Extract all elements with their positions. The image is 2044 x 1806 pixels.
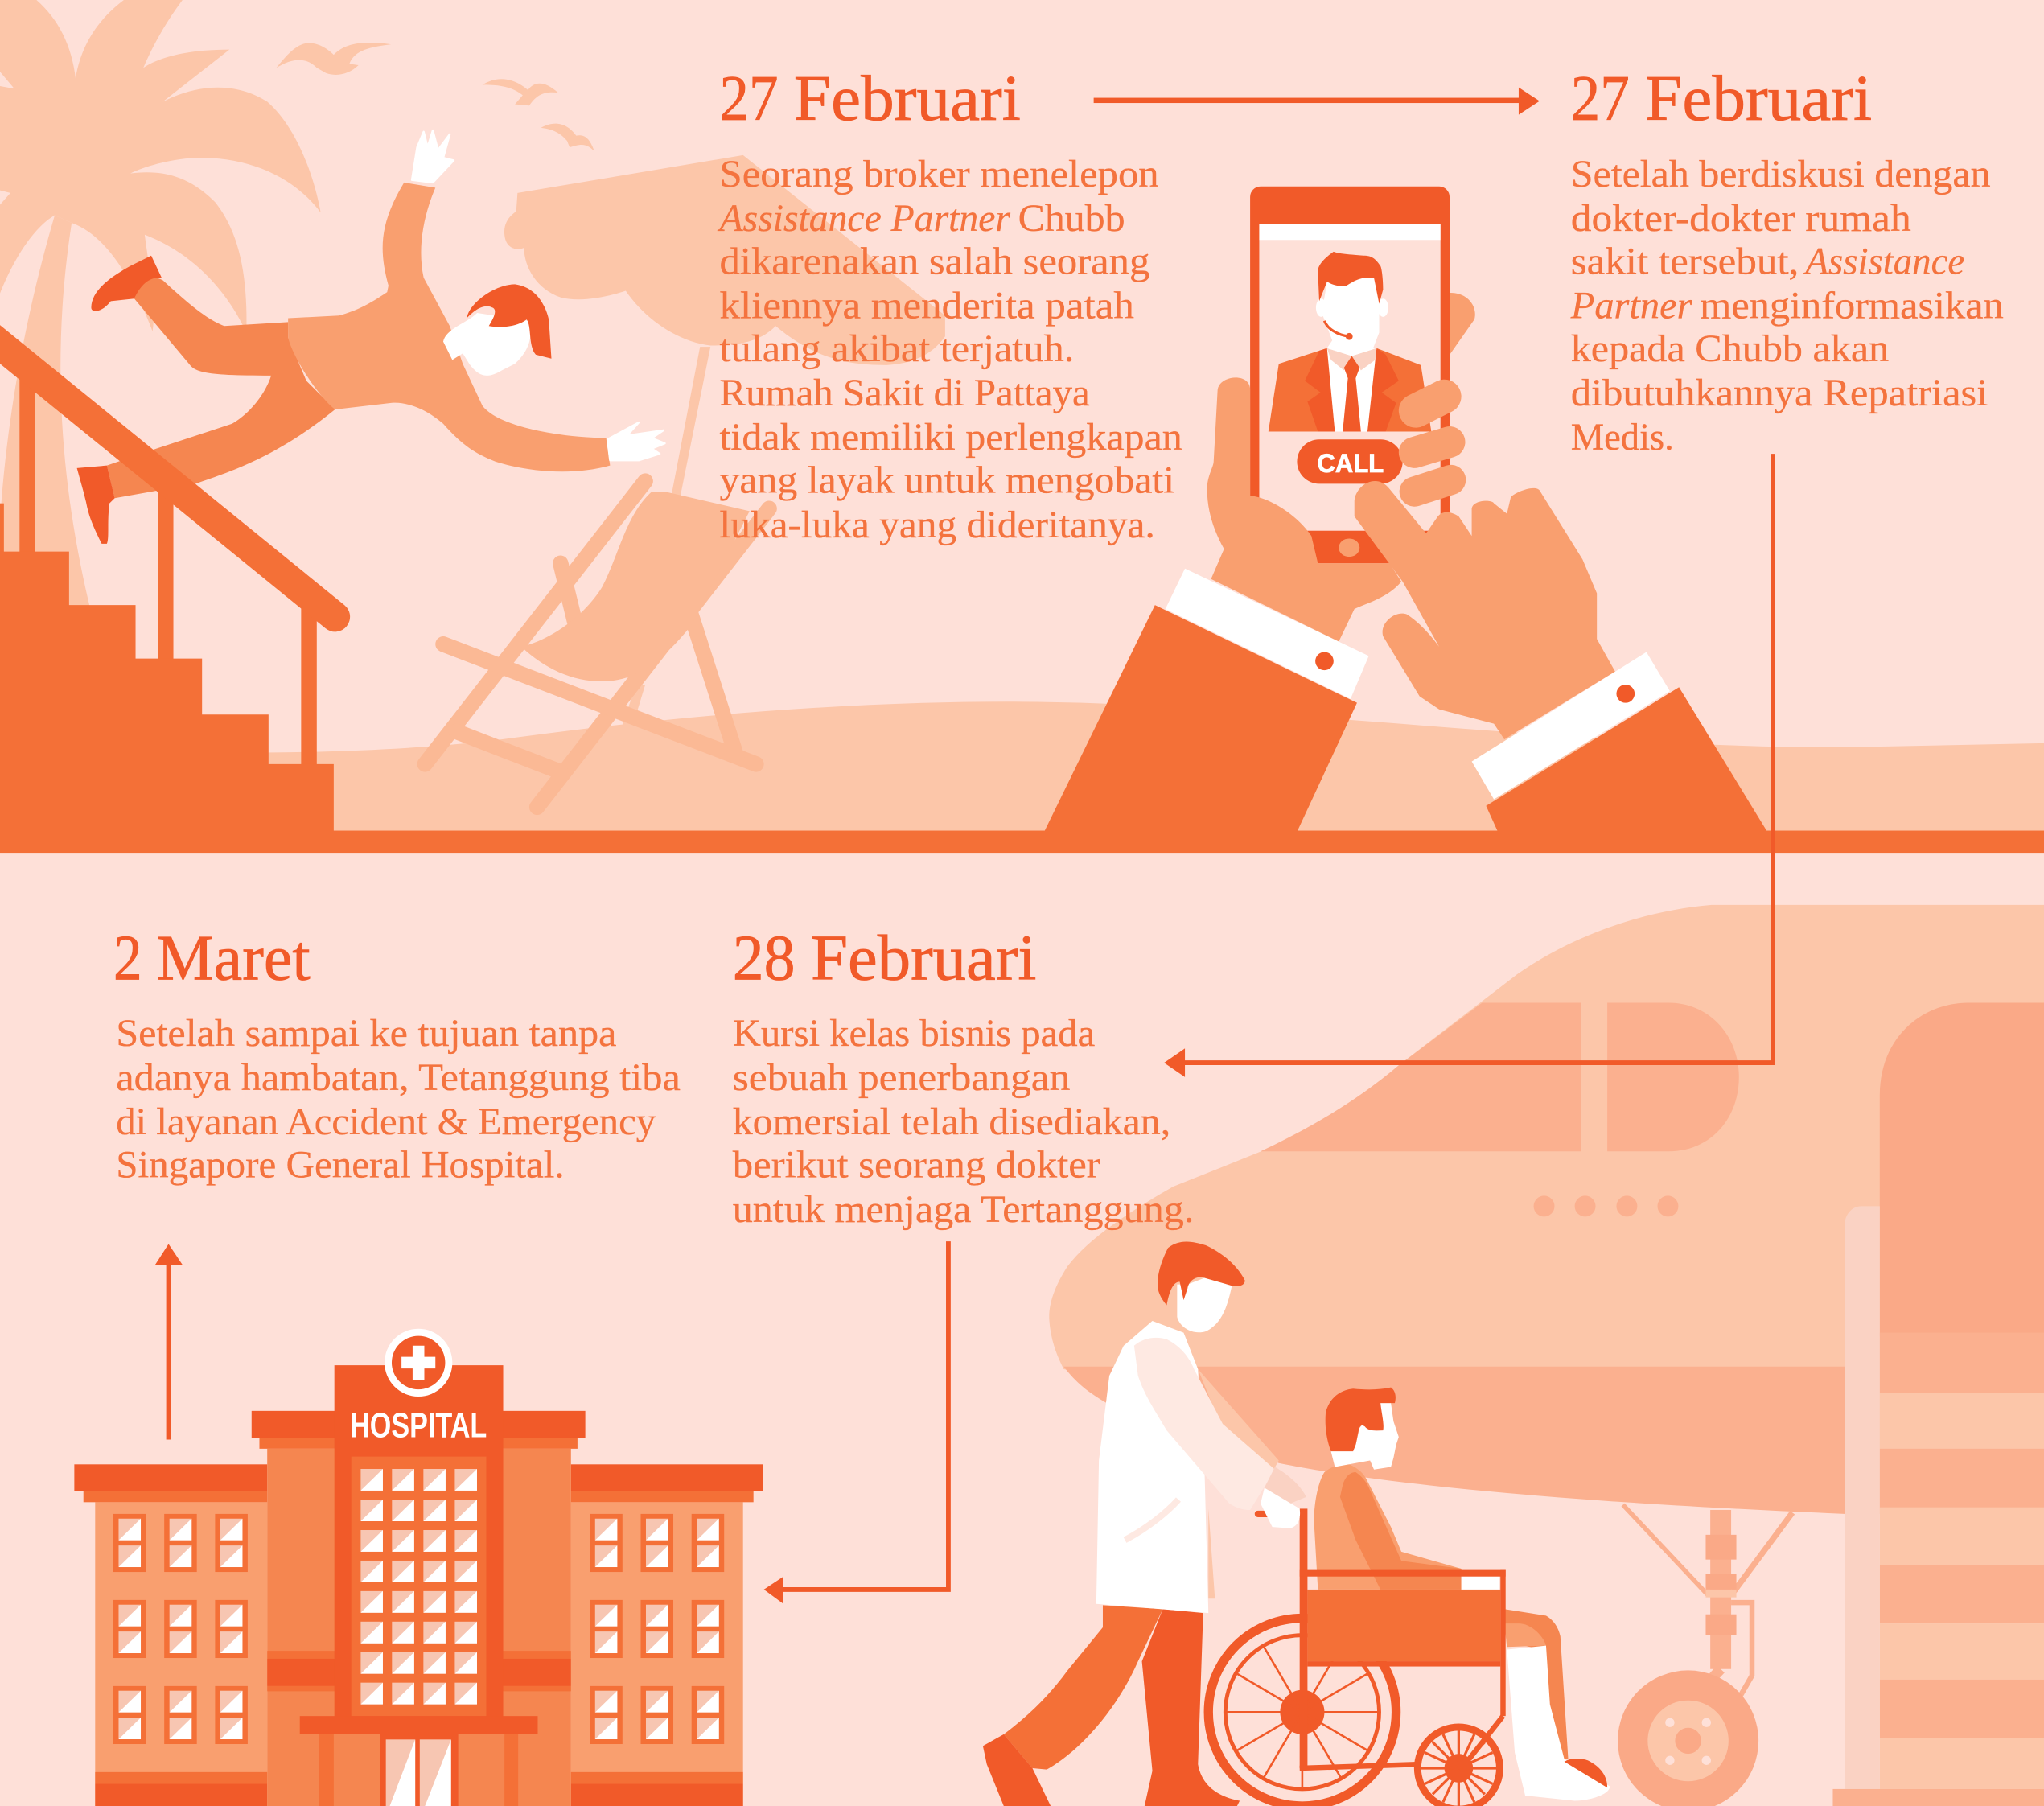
date heading: 27 Februari right: Februari — [1645, 62, 1872, 134]
tower — [335, 1365, 504, 1734]
hand on wheelchair handle — [1261, 1487, 1300, 1528]
raised hand — [412, 130, 454, 183]
date heading: 28 Februari: Februari — [811, 921, 1036, 994]
boarding stairs and door — [1832, 1003, 2044, 1806]
far arm — [1198, 1369, 1279, 1598]
front trouser leg — [1142, 1609, 1240, 1806]
text block: broker: yang layak untuk mengobati — [720, 459, 1174, 502]
portholes — [1534, 1195, 1678, 1216]
text block: broker: Chubb — [1018, 197, 1125, 240]
text block: business class: berikut seorang dokter — [733, 1144, 1100, 1187]
call button — [1297, 439, 1403, 483]
call button: CALL — [1318, 449, 1384, 478]
text block: broker: Assistance Partner — [718, 197, 1010, 240]
medical cross emblem — [385, 1329, 452, 1397]
doctor — [983, 1242, 1306, 1806]
date heading: 2 Maret: Maret — [156, 921, 311, 994]
staircase — [0, 552, 334, 841]
fuselage — [1049, 905, 2044, 1514]
ground strip — [0, 831, 2044, 853]
wheelchair frame — [1258, 1508, 1506, 1768]
text block: broker: tidak memiliki perlengkapan — [720, 416, 1182, 459]
hair — [1326, 1388, 1396, 1451]
landing gear — [1618, 1505, 1792, 1806]
text block: business class: untuk menjaga Tertanggung. — [733, 1188, 1194, 1231]
white armrest pad — [1462, 1574, 1499, 1590]
pale wrist — [1265, 1467, 1306, 1506]
text block: doctors discussion: dibutuhkannya Repatriasi — [1571, 372, 1988, 414]
text block: business class: sebuah penerbangan — [733, 1056, 1071, 1099]
text block: arrival — [116, 1012, 681, 1187]
small wheel — [1417, 1727, 1499, 1806]
hair — [1158, 1242, 1245, 1306]
text block: arrival: adanya hambatan, Tetanggung tiba — [116, 1056, 681, 1099]
date heading: 28 Februari: 28 — [733, 921, 796, 994]
foot — [1565, 1759, 1607, 1787]
torso — [1314, 1464, 1462, 1590]
birds — [277, 43, 594, 151]
text block: doctors discussion: Medis. — [1571, 416, 1674, 459]
belly — [1063, 1367, 1845, 1514]
left hand holding phone — [1207, 377, 1451, 642]
text block: broker: Seorang broker menelepon — [720, 153, 1159, 195]
connector arrow: to 28 Februari — [1164, 454, 1773, 1077]
right wing — [571, 1464, 763, 1806]
beach umbrella — [504, 155, 945, 741]
left wing — [74, 1464, 267, 1806]
outstretched hand — [607, 422, 664, 460]
back trouser leg — [1004, 1605, 1163, 1770]
text block: doctors discussion: Setelah berdiskusi dengan — [1571, 153, 1991, 195]
smartphone — [1250, 187, 1450, 563]
text block: broker — [718, 153, 1182, 546]
palm tree — [0, 0, 321, 613]
arm — [1340, 1472, 1462, 1590]
text block: broker: kliennya menderita patah — [720, 285, 1134, 327]
hand behind phone finger — [1445, 293, 1475, 359]
center block — [252, 1411, 586, 1806]
patient thigh and leg — [1504, 1609, 1569, 1759]
text block: doctors discussion: sakit tersebut, — [1571, 240, 1799, 282]
text block: doctors discussion — [1570, 153, 2004, 459]
left suit sleeve — [1043, 569, 1369, 834]
airplane — [1049, 905, 2044, 1514]
entrance — [300, 1716, 537, 1806]
date heading: 27 Februari right: 27 — [1571, 62, 1630, 134]
torso and arms — [288, 183, 610, 471]
right hand tapping call — [1355, 481, 1615, 739]
text block: doctors discussion: kepada Chubb akan — [1571, 327, 1889, 370]
text block: arrival: Singapore General Hospital. — [116, 1144, 565, 1187]
arrow: top right — [1094, 88, 1540, 115]
text block: doctors discussion: dokter-dokter rumah — [1571, 197, 1911, 240]
home button — [1339, 538, 1359, 557]
lab coat — [1096, 1321, 1208, 1613]
big wheel — [1208, 1619, 1396, 1806]
shoe — [983, 1734, 1051, 1806]
date heading: 27 Februari left: Februari — [794, 62, 1021, 134]
connector arrow: to 2 Maret — [155, 1244, 183, 1440]
right suit sleeve — [1472, 652, 1769, 834]
text block: broker: Rumah Sakit di Pattaya — [720, 372, 1090, 414]
hospital sign: HOSPITAL — [350, 1405, 487, 1445]
text block: broker: luka-luka yang dideritanya. — [720, 504, 1155, 546]
text block: business class: komersial telah disediakan, — [733, 1100, 1170, 1143]
leg cast — [1507, 1646, 1610, 1801]
stair railing — [0, 334, 335, 767]
date heading: 2 Maret: 2 — [113, 921, 142, 994]
hospital building — [74, 1329, 763, 1806]
connector arrow: to hospital — [764, 1241, 948, 1604]
hair — [467, 284, 551, 359]
tower windows — [360, 1469, 477, 1705]
cockpit windows — [1261, 1003, 1581, 1151]
head — [1177, 1278, 1232, 1332]
face — [1331, 1403, 1399, 1470]
text block: broker: tulang akibat terjatuh. — [720, 327, 1074, 370]
head — [443, 313, 530, 376]
beach sand — [0, 701, 2044, 841]
patient in wheelchair — [1208, 1388, 1610, 1806]
text block: doctors discussion: menginformasikan — [1700, 285, 2004, 327]
pocket — [1125, 1500, 1178, 1540]
falling man — [77, 130, 664, 544]
text block: doctors discussion: Partner — [1570, 285, 1692, 327]
wheel — [1618, 1670, 1758, 1806]
coat sleeve — [1134, 1338, 1275, 1510]
beach chair — [425, 481, 769, 807]
text block: doctors discussion: Assistance — [1803, 240, 1964, 282]
text block: arrival: Setelah sampai ke tujuan tanpa — [116, 1012, 617, 1055]
date heading: 27 Februari left: 27 — [720, 62, 778, 134]
call agent — [1269, 252, 1431, 432]
text block: arrival: di layanan Accident & Emergency — [116, 1100, 656, 1143]
legs — [107, 278, 335, 498]
text block: business class: Kursi kelas bisnis pada — [733, 1012, 1095, 1055]
shoes — [91, 256, 162, 311]
text block: business class — [733, 1012, 1194, 1231]
text block: broker: dikarenakan salah seorang — [720, 240, 1149, 282]
